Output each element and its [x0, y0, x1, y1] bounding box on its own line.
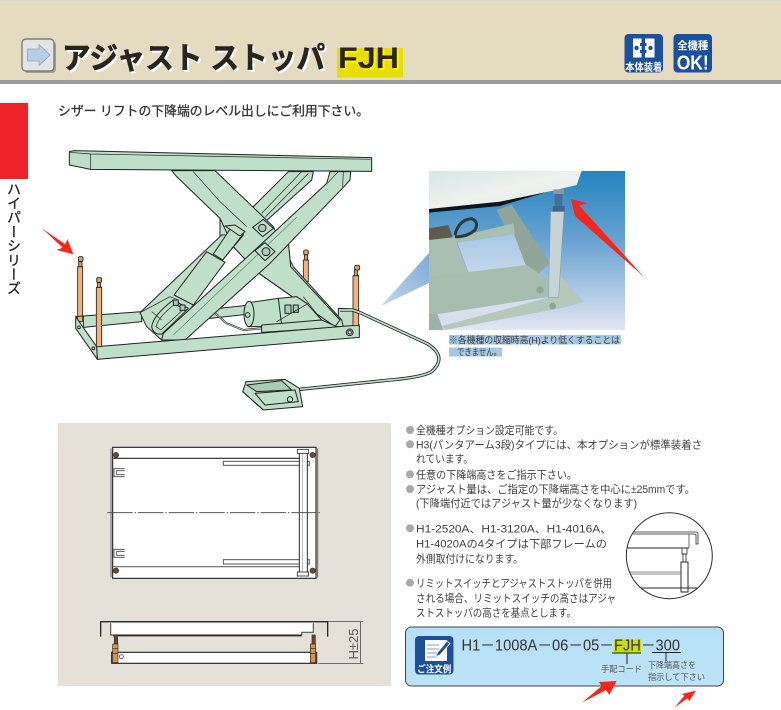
scissor lower rear fill [257, 242, 340, 327]
order example box [406, 627, 724, 686]
model code FJH: FJH [340, 44, 401, 77]
feature list: 外側取付けになります。 [416, 552, 523, 566]
subtitle: シザー リフトの下降端のレベル出しにご利用下さい。 [58, 104, 369, 118]
arrow: height pointer [674, 691, 696, 708]
order example box: H1－1008A－06－05－FJH－300 [462, 638, 680, 654]
badge: all models OK: 全機種 [677, 39, 709, 52]
feature list: H1-2520A、H1-3120A、H1-4016A、 [416, 524, 612, 536]
order example box: 下降端高さを [648, 660, 696, 670]
badge: body mounted: 本体装着 [625, 60, 662, 74]
badge: all models OK: OK! [677, 52, 709, 74]
front frame [97, 325, 359, 359]
circular detail [625, 513, 712, 599]
rear scissor arm [250, 172, 313, 225]
badge: all models OK [674, 34, 712, 74]
feature list: H3(パンタアーム3段)タイプには、本オプションが標準装着さ [416, 438, 702, 452]
hydraulic hoses [140, 297, 188, 334]
side tab [0, 103, 28, 296]
scissor arm down-right [172, 171, 343, 327]
foot pedal [243, 379, 303, 410]
gap behind cylinder [196, 249, 243, 303]
feature list: れています。 [416, 452, 473, 466]
side tab: ハイパーシリーズ [6, 182, 22, 296]
icon: title arrow [22, 39, 56, 73]
feature list: 任意の下降端高さをご指示下さい。 [416, 468, 577, 482]
arrow: photo pointer [571, 199, 644, 277]
pivot blocks [253, 219, 275, 261]
stopper: front left and front right [96, 265, 360, 347]
cylinder [174, 252, 225, 305]
cylinder mount arm [140, 235, 243, 340]
side view drawing [101, 622, 363, 663]
title: アジャスト ストッパ [64, 44, 327, 78]
feature list: アジャスト量は、ご指定の下降端高さを中心に±25mmです。 [416, 482, 695, 496]
order example box: 手配コード [601, 664, 642, 674]
rear frame [83, 312, 142, 327]
panel: dimension drawings [58, 423, 391, 686]
front scissor arm [162, 172, 351, 340]
model code FJH: FJH [338, 42, 399, 75]
header band [0, 0, 781, 84]
photo note: ※各機種の収縮時高(H)より低くすることは [449, 334, 620, 346]
title: アジャスト ストッパ [62, 42, 325, 76]
feature list: 全機種オプション設定可能です。 [416, 423, 563, 437]
feature list: (下降端付近ではアジャスト量が少なくなります) [416, 496, 637, 510]
order example box: 指示して下さい [648, 672, 705, 682]
feature list [406, 423, 702, 620]
table top [69, 151, 372, 171]
plan view drawing [107, 447, 322, 578]
photo note [449, 334, 621, 358]
icon: order example [415, 636, 454, 676]
centre plate [220, 213, 312, 290]
motor base plate [262, 320, 338, 332]
feature list: ストストッパの高さを基点とします。 [416, 606, 576, 620]
callout beam [381, 253, 429, 306]
feature list: される場合、リミットスイッチの高さはアジャ [416, 591, 616, 605]
control cord [300, 310, 439, 389]
motor [245, 297, 322, 327]
lift illustration [69, 151, 439, 410]
stopper: rear left and rear right [78, 250, 308, 322]
arrow: stopper pointer [42, 228, 73, 254]
icon: order example: ご注文例 [417, 664, 451, 676]
photo: stopper close-up [429, 171, 625, 330]
dimension label: H±25 [346, 629, 361, 659]
badge: body mounted [624, 34, 663, 74]
feature list: H1-4020Aの4タイプは下部フレームの [416, 538, 607, 550]
feature list: リミットスイッチとアジャストストッパを併用 [416, 576, 612, 590]
arrow: code pointer [582, 681, 617, 703]
photo note: できません。 [457, 348, 501, 358]
